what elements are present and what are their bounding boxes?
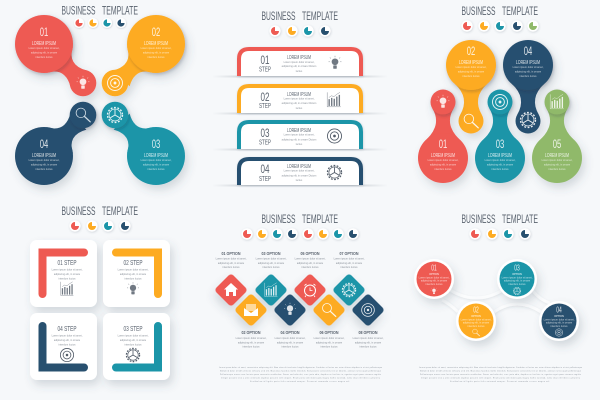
- step 01 tab: 01: [260, 55, 270, 67]
- circle 04: interdum luctus: [551, 325, 568, 328]
- lower option labels: interdum luctus: [360, 346, 377, 348]
- title: TEMPLATE: [302, 214, 338, 226]
- panel: four corner cards: [30, 206, 170, 380]
- step 02 tab: luctus: [296, 107, 303, 110]
- circle 02: adipiscing elit, in ornare: [463, 322, 490, 324]
- title: TEMPLATE: [302, 11, 338, 23]
- body paragraph: Nullam id dolor id nibh ultricies vehicula ut id elit. Maecenas faucibus mollis interdum. Sed posuere consectetur est at lobortis, aenean eu leo quam pellentesque: [420, 370, 581, 372]
- diamond 01 home: [214, 273, 248, 307]
- colour dots: [74, 18, 126, 28]
- lower option labels: adipiscing elit, in ornare: [355, 342, 382, 344]
- card 02 step: adipiscing elit, in ornare: [120, 273, 147, 276]
- drop 05: adipiscing elit, in ornare: [544, 164, 571, 166]
- step 03 tab: 03: [260, 128, 270, 140]
- card 04 step: interdum luctus: [59, 344, 76, 346]
- step 01 tab: STEP: [259, 66, 271, 74]
- circle 01: adipiscing elit, in ornare: [421, 280, 448, 282]
- drop 03: [475, 90, 525, 183]
- step 03 tab: STEP: [259, 140, 271, 146]
- step 04 tab: STEP: [259, 176, 271, 183]
- card 01 step: interdum luctus: [59, 278, 76, 280]
- upper option labels: interdum luctus: [263, 266, 280, 269]
- card 01 step: [30, 240, 97, 307]
- lower option labels: 06 OPTION: [320, 330, 338, 335]
- card 04 step: 04 STEP: [58, 324, 76, 333]
- panel: eight option diamonds: [214, 214, 385, 383]
- step 04 tab: [212, 159, 388, 186]
- upper option labels: adipiscing elit, in ornare: [336, 262, 363, 265]
- drop 05: 05: [553, 139, 561, 151]
- lower option labels: adipiscing elit, in ornare: [316, 342, 343, 344]
- title: BUSINESS: [462, 6, 496, 18]
- petal 01: LOREM IPSUM: [32, 41, 56, 47]
- circle 01: interdum luctus: [426, 283, 443, 286]
- colour dots: [269, 25, 331, 37]
- circle 01: Lorem ipsum dolor sit amet,: [419, 276, 450, 280]
- title: BUSINESS: [462, 214, 496, 226]
- petal 02: LOREM IPSUM: [144, 41, 168, 47]
- upper option labels: 03 OPTION: [262, 251, 280, 256]
- drop 01: [418, 90, 468, 183]
- drop 02: 02: [467, 46, 475, 58]
- lower option labels: adipiscing elit, in ornare: [238, 342, 265, 344]
- drop 04: [503, 40, 553, 134]
- title: BUSINESS: [62, 6, 96, 18]
- lower option labels: 08 OPTION: [358, 330, 378, 335]
- step 04 tab: Lorem ipsum dolor sit amet,: [284, 170, 315, 172]
- drop 01: LOREM IPSUM: [431, 153, 455, 159]
- petal 01: Lorem ipsum dolor sit amet,: [29, 47, 60, 50]
- lower option labels: Lorem ipsum dolor sit amet,: [275, 337, 306, 340]
- panel: five vertical drop shapes: [418, 6, 582, 183]
- step 04 tab: adipiscing elit, in ornare Dictum: [282, 174, 316, 178]
- step 02 tab: adipiscing elit, in ornare Dictum: [282, 102, 316, 105]
- diamond 04 bulb: [273, 293, 307, 327]
- upper option labels: Lorem ipsum dolor sit amet,: [334, 258, 365, 260]
- petal 01: adipiscing elit, in ornare: [31, 52, 58, 54]
- card 03 step: adipiscing elit, in ornare: [120, 339, 147, 342]
- body paragraph: Lorem ipsum dolor sit amet, consectetur adipiscing elit. Nam vitae elit sed ante fringilla dignissim. Curabitur at lectus nec enim ultrices dapibus in ut nisi pellentesque: [419, 366, 582, 369]
- diamond 05 clock: [293, 273, 327, 307]
- drop 02: adipiscing elit, in ornare: [458, 70, 485, 74]
- lower option labels: 02 OPTION: [242, 330, 260, 335]
- card 03 step: Lorem ipsum dolor sit amet,: [118, 334, 149, 338]
- card 04 step: Lorem ipsum dolor sit amet,: [52, 334, 83, 338]
- circle 04: 04: [556, 306, 562, 314]
- body paragraph: [419, 366, 582, 383]
- title: TEMPLATE: [502, 6, 538, 18]
- circle 03: 03: [514, 264, 520, 272]
- drop 04: interdum luctus: [520, 75, 537, 78]
- petal 01: 01: [40, 27, 48, 39]
- circle 02: OPTION: [471, 315, 481, 318]
- circle 03: Lorem ipsum dolor sit amet,: [502, 276, 533, 280]
- body paragraph: Vestibulum id ligula porta felis euismod semper. Praesent commodo cursus magna vel.: [450, 380, 550, 383]
- petal 03: [102, 102, 185, 185]
- lower option labels: interdum luctus: [243, 346, 260, 348]
- upper option labels: adipiscing elit, in ornare: [258, 262, 285, 265]
- drop 01: interdum luctus: [435, 168, 452, 171]
- lower option labels: [236, 330, 384, 348]
- body paragraph: Vestibulum id ligula porta felis euismod semper. Praesent commodo cursus magna vel.: [250, 380, 350, 383]
- diamond 02 envelope: [234, 293, 268, 327]
- card 03 step: interdum luctus: [125, 344, 142, 346]
- title: BUSINESS: [262, 214, 296, 226]
- upper option labels: Lorem ipsum dolor sit amet,: [256, 258, 287, 260]
- drop 05: LOREM IPSUM: [545, 153, 569, 159]
- card 02 step: [103, 240, 170, 307]
- drop 01: adipiscing elit, in ornare: [430, 164, 457, 166]
- lower option labels: adipiscing elit, in ornare: [277, 342, 304, 344]
- circle 04: [539, 301, 579, 341]
- drop 05: interdum luctus: [549, 168, 566, 171]
- diamond 06 magnifier: [312, 293, 346, 327]
- step 02 tab: [212, 86, 388, 114]
- drop 03: interdum luctus: [492, 168, 509, 171]
- drop 05: [532, 90, 582, 183]
- step 03 tab: LOREM IPSUM: [287, 128, 311, 134]
- step 03 tab: adipiscing elit, in ornare Dictum: [282, 138, 316, 142]
- card 02 step: Lorem ipsum dolor sit amet,: [118, 268, 149, 272]
- card 02 step: interdum luctus: [125, 278, 142, 280]
- petal 04: adipiscing elit, in ornare: [31, 164, 58, 166]
- petal 03: LOREM IPSUM: [144, 153, 168, 159]
- drop 02: LOREM IPSUM: [459, 60, 483, 66]
- drop 04: LOREM IPSUM: [516, 60, 540, 66]
- upper option labels: interdum luctus: [302, 266, 319, 269]
- step 03 tab: luctus: [296, 143, 303, 146]
- petal 04: [15, 102, 96, 185]
- lower option labels: Lorem ipsum dolor sit amet,: [353, 337, 384, 340]
- title: TEMPLATE: [102, 206, 138, 218]
- upper option labels: adipiscing elit, in ornare: [297, 262, 324, 265]
- step 04 tab: 04: [260, 164, 270, 176]
- body paragraph: Integer posuere erat a ante venenatis dapibus posuere velit aliquet. Etiam porta sem malesuada magna mollis euismod, nulla vitae elit libero a pharetra: [221, 376, 380, 380]
- upper option labels: interdum luctus: [223, 266, 240, 269]
- drop 02: Lorem ipsum dolor sit amet,: [456, 66, 487, 69]
- circle 02: 02: [473, 306, 479, 314]
- circle 03: [497, 259, 537, 299]
- upper option labels: 07 OPTION: [340, 251, 358, 256]
- step 02 tab: LOREM IPSUM: [287, 92, 311, 98]
- circle 04: adipiscing elit, in ornare: [546, 322, 573, 324]
- step 01 tab: [212, 49, 388, 78]
- drop 03: adipiscing elit, in ornare: [487, 164, 514, 166]
- petal 02: 02: [152, 27, 160, 39]
- lower option labels: 04 OPTION: [280, 330, 300, 335]
- step 04 tab: LOREM IPSUM: [287, 164, 311, 170]
- circle 01: [414, 259, 454, 299]
- title: TEMPLATE: [502, 214, 538, 226]
- card 01 step: 01 STEP: [58, 258, 76, 267]
- diamond 07 gear: [332, 273, 366, 307]
- body paragraph: Pellentesque ornare sem lacinia quam venenatis vestibulum. Donec sed odio dui, cras justo odio, dapibus ac facilisis in, egestas eget quam vivamus sagittis: [420, 373, 581, 376]
- title: TEMPLATE: [102, 6, 138, 18]
- drop 03: LOREM IPSUM: [488, 153, 512, 159]
- step 03 tab: Lorem ipsum dolor sit amet,: [284, 134, 315, 136]
- drop 02: [446, 40, 496, 134]
- petal 02: interdum luctus: [148, 56, 165, 59]
- panel: four-petal connected circles: [15, 6, 185, 185]
- step 02 tab: 02: [260, 92, 270, 104]
- drop 04: Lorem ipsum dolor sit amet,: [513, 66, 544, 69]
- step 01 tab: Lorem ipsum dolor sit amet,: [284, 61, 315, 64]
- drop 01: 01: [439, 139, 447, 151]
- petal 04: Lorem ipsum dolor sit amet,: [29, 159, 60, 162]
- circle 03: adipiscing elit, in ornare: [504, 280, 531, 282]
- title: BUSINESS: [262, 11, 296, 23]
- drop 05: Lorem ipsum dolor sit amet,: [542, 159, 573, 162]
- colour dots: [241, 228, 359, 240]
- petal 04: LOREM IPSUM: [32, 153, 56, 159]
- circle 02: [456, 301, 496, 341]
- petal 03: interdum luctus: [148, 168, 165, 171]
- diamond 03 chart: [254, 273, 288, 307]
- panel: stepped tabs: [212, 11, 388, 186]
- circle 02: interdum luctus: [468, 325, 485, 328]
- lower option labels: Lorem ipsum dolor sit amet,: [314, 337, 345, 340]
- colour dots: [69, 220, 131, 232]
- upper option labels: Lorem ipsum dolor sit amet,: [295, 258, 326, 260]
- step 01 tab: adipiscing elit, in ornare Dictum: [282, 65, 316, 68]
- petal 04: interdum luctus: [36, 168, 53, 171]
- circle 01: OPTION: [429, 273, 439, 276]
- step 02 tab: Lorem ipsum dolor sit amet,: [284, 98, 315, 100]
- drop 03: Lorem ipsum dolor sit amet,: [485, 159, 516, 162]
- card 03 step: 03 STEP: [124, 324, 142, 333]
- petal 02: adipiscing elit, in ornare: [143, 52, 170, 54]
- card 04 step: adipiscing elit, in ornare: [54, 339, 81, 342]
- petal 03: adipiscing elit, in ornare: [143, 164, 170, 166]
- step 02 tab: STEP: [259, 103, 271, 110]
- step 01 tab: luctus: [296, 70, 303, 73]
- lower option labels: interdum luctus: [282, 346, 299, 348]
- petal 03: Lorem ipsum dolor sit amet,: [141, 159, 172, 162]
- body paragraph: Lorem ipsum dolor sit amet, consectetur adipiscing elit. Nam vitae elit sed ante fringilla dignissim. Curabitur at lectus nec enim ultrices dapibus in ut nisi pellentesque: [219, 366, 382, 369]
- drop 04: 04: [524, 46, 533, 58]
- body paragraph: [219, 366, 382, 383]
- petal 04: 04: [40, 139, 49, 151]
- upper option labels: 05 OPTION: [300, 251, 320, 256]
- upper option labels: 01 OPTION: [222, 251, 240, 256]
- title: BUSINESS: [62, 206, 96, 218]
- card 01 step: Lorem ipsum dolor sit amet,: [52, 268, 83, 272]
- upper option labels: Lorem ipsum dolor sit amet,: [216, 258, 247, 260]
- circle 02: Lorem ipsum dolor sit amet,: [461, 318, 492, 322]
- step 03 tab: [212, 122, 388, 150]
- panel: four linked ring circles: [414, 214, 582, 383]
- step 04 tab: luctus: [296, 179, 303, 182]
- colour dots: [469, 228, 531, 240]
- petal 01: [15, 15, 96, 96]
- step 01 tab: LOREM IPSUM: [287, 55, 311, 61]
- body paragraph: Integer posuere erat a ante venenatis dapibus posuere velit aliquet. Etiam porta sem malesuada magna mollis euismod, nulla vitae elit libero a pharetra: [421, 376, 580, 380]
- card 02 step: 02 STEP: [124, 258, 142, 267]
- petal 01: interdum luctus: [36, 56, 53, 59]
- connector ribbons: [442, 290, 550, 312]
- upper option labels: adipiscing elit, in ornare: [218, 262, 245, 265]
- drop 01: Lorem ipsum dolor sit amet,: [428, 159, 459, 162]
- lower option labels: interdum luctus: [321, 346, 338, 348]
- petal 03: 03: [152, 139, 160, 151]
- petal 02: [102, 15, 185, 96]
- circle 04: Lorem ipsum dolor sit amet,: [544, 318, 575, 322]
- diamond 08 target: [351, 293, 385, 327]
- circle 03: OPTION: [512, 273, 522, 276]
- card 01 step: adipiscing elit, in ornare: [54, 273, 81, 276]
- upper option labels: interdum luctus: [341, 266, 358, 269]
- circle 03: interdum luctus: [509, 283, 526, 286]
- drop 02: interdum luctus: [463, 75, 480, 78]
- lower option labels: Lorem ipsum dolor sit amet,: [236, 337, 267, 340]
- upper option labels: [216, 251, 365, 269]
- body paragraph: Nullam id dolor id nibh ultricies vehicula ut id elit. Maecenas faucibus mollis interdum. Sed posuere consectetur est at lobortis, aenean eu leo quam pellentesque: [220, 370, 381, 372]
- circle 04: OPTION: [554, 315, 564, 318]
- circle 01: 01: [431, 264, 437, 272]
- body paragraph: Pellentesque ornare sem lacinia quam venenatis vestibulum. Donec sed odio dui, cras justo odio, dapibus ac facilisis in, egestas eget quam vivamus sagittis: [220, 373, 381, 376]
- card 04 step: [30, 313, 97, 380]
- colour dots: [461, 20, 539, 32]
- drop 04: adipiscing elit, in ornare: [515, 70, 542, 74]
- card 03 step: [103, 313, 170, 380]
- petal 02: Lorem ipsum dolor sit amet,: [141, 47, 172, 50]
- drop 03: 03: [496, 139, 504, 151]
